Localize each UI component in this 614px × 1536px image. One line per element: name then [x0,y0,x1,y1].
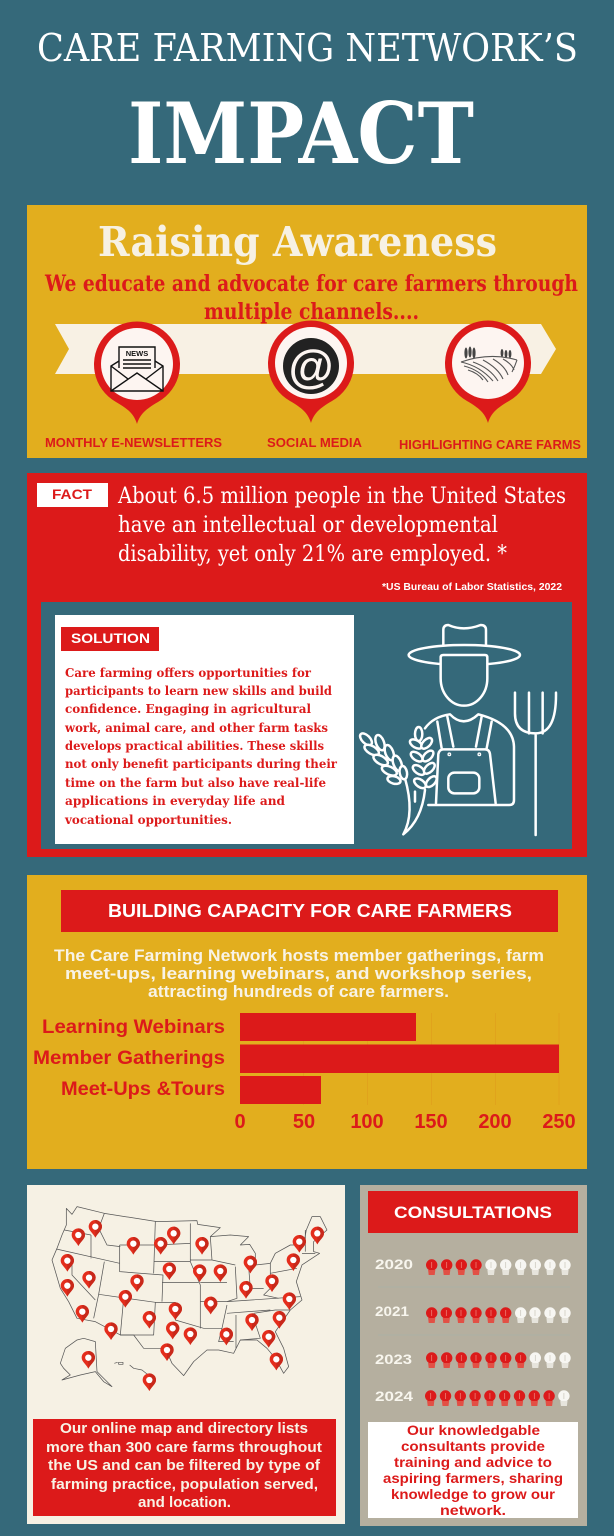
pictogram row: 2023 [375,1351,571,1368]
text: solution description: work, animal care, and other farm tasks [64,720,328,735]
icon: newsletter pin [94,321,180,424]
bar chart: 250 [542,1111,576,1133]
bar chart: 200 [478,1111,512,1133]
bar chart [33,1013,576,1133]
text: fact statement [117,484,566,567]
title: CARE FARMING NETWORK’S [37,26,578,70]
icon: farmer with wheat and pitchfork [358,625,556,835]
consultations banner: CONSULTATIONS [394,1203,552,1222]
pictogram row: 2020 [375,1256,571,1275]
heading: raising awareness: Raising Awareness [98,218,497,266]
panel: map and directory [27,1185,345,1524]
text: solution description: vocational opportunities. [64,812,232,827]
consultations description: training and advice to [394,1454,552,1470]
text: advocacy statement [44,271,578,325]
icon: farm fields pin [445,320,531,423]
pictogram row: 2020: 2020 [375,1256,413,1272]
US map with pins [52,1207,327,1391]
consultations description: consultants provide [401,1438,545,1454]
text: capacity description: attracting hundreds of care farmers. [148,982,449,1001]
text: fact statement: have an intellectual or developmental [118,513,498,538]
text: solution description: develops practical abilities. These skills [65,738,324,753]
bar chart: 50 [293,1111,315,1133]
panel: raising awareness [27,205,587,458]
consultations banner [368,1191,578,1233]
fact tag: FACT [52,486,92,502]
icon: social media pin [268,320,354,423]
bar chart: 0 [234,1111,246,1133]
title [37,26,578,183]
text: solution description: participants to learn new skills and build [65,683,332,698]
map caption: farming practice, population served, [51,1477,318,1493]
map caption: Our online map and directory lists [60,1421,308,1437]
pictogram row: 2024: 2024 [375,1388,413,1404]
solution card [55,615,354,844]
text: capacity description: meet-ups, learning webinars, and workshop series, [65,964,532,983]
title: IMPACT [128,84,474,183]
consultations description [368,1422,578,1518]
solution tag [61,627,159,651]
pictogram row: 2024 [375,1388,570,1406]
pictogram row: 2021 [375,1303,571,1323]
map caption: more than 300 care farms throughout [46,1440,322,1456]
consultations description: Our knowledgable [407,1422,540,1438]
solution tag: SOLUTION [71,630,150,646]
consultations description: knowledge to grow our [391,1486,556,1502]
text: fact statement: About 6.5 million people in the United States [117,484,566,509]
bar chart: Learning Webinars [42,1017,225,1038]
text: solution description [64,665,337,827]
text: source note: *US Bureau of Labor Statistics, 2022 [382,581,562,593]
panel: consultations [360,1185,587,1526]
map caption [33,1419,336,1516]
text: solution description: time on the farm but also have real-life [65,775,326,790]
map caption: and location. [138,1495,231,1511]
ribbon [55,324,556,374]
fact tag [37,483,108,507]
text: advocacy statement: multiple channels.... [204,299,419,325]
text: solution description: confidence. Engaging in agricultural [65,701,311,716]
map caption: the US and can be filtered by type of [48,1458,320,1474]
text: capacity description: The Care Farming Network hosts member gatherings, farm [54,946,544,965]
bar chart: 100 [350,1111,384,1133]
label: monthly e-newsletters: MONTHLY E-NEWSLETTERS [45,436,222,450]
bar chart: Member Gatherings [33,1048,225,1069]
icon: social media pin: @ [289,340,333,392]
banner heading: BUILDING CAPACITY FOR CARE FARMERS [108,901,512,921]
text: fact statement: disability, yet only 21% are employed. * [118,542,507,567]
consultations description: network. [440,1502,506,1518]
consultations description: aspiring farmers, sharing [383,1470,563,1486]
text: solution description: not only benefit participants during their [65,756,337,771]
panel: building capacity [27,875,587,1169]
text: solution description: Care farming offers opportunities for [65,665,311,680]
label: social media: SOCIAL MEDIA [267,436,362,450]
panel: fact and solution [27,473,587,857]
label: highlighting care farms: HIGHLIGHTING CARE FARMS [399,438,581,452]
bar chart: Meet-Ups &Tours [61,1079,225,1100]
pictogram row: 2021: 2021 [375,1303,409,1319]
bar chart: 150 [414,1111,448,1133]
text: capacity description [54,946,544,1001]
pictogram row: 2023: 2023 [375,1351,412,1367]
inner teal panel [41,602,572,849]
banner heading [61,890,558,932]
text: solution description: applications in everyday life and [65,793,285,808]
icon: newsletter pin: NEWS [126,349,148,358]
